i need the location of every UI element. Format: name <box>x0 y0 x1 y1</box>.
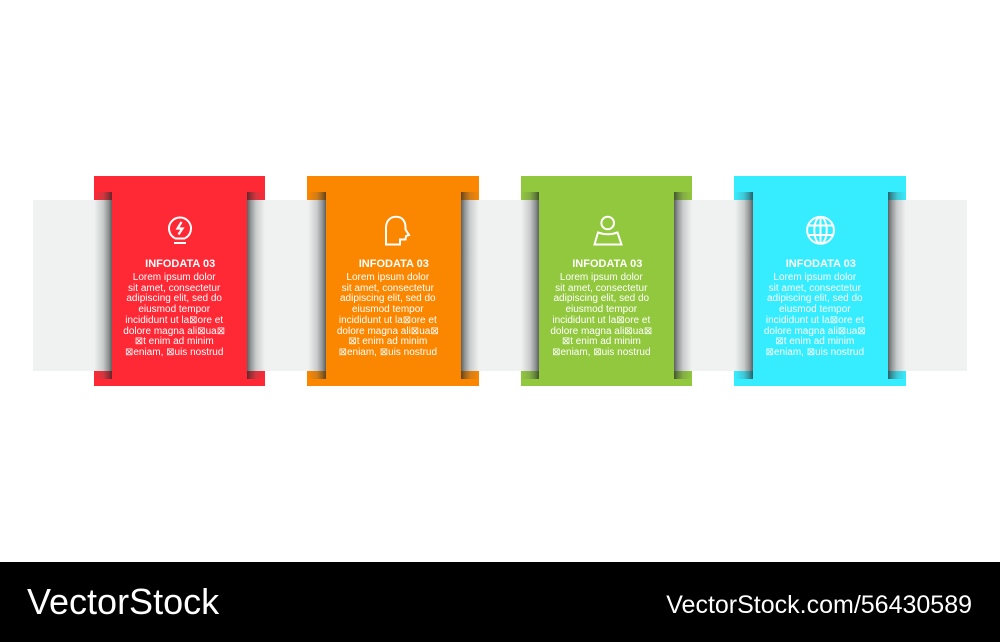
icon: head profile <box>385 216 410 246</box>
text block: sit amet, consectetur <box>342 283 434 294</box>
text block: dolore magna ali⊠ua⊠ <box>764 326 866 337</box>
footer bar <box>0 562 1000 642</box>
icon: globe <box>806 216 835 245</box>
icon: person on map <box>593 216 623 246</box>
text block: ⊠t enim ad minim <box>135 336 214 347</box>
text block: adipiscing elit, sed do <box>553 293 649 304</box>
text block: sit amet, consectetur <box>769 283 861 294</box>
panel: card 1 red <box>94 176 265 386</box>
text block: adipiscing elit, sed do <box>767 293 863 304</box>
text block: incididunt ut la⊠ore et <box>339 315 437 326</box>
text block: dolore magna ali⊠ua⊠ <box>337 326 439 337</box>
panel: card 2 orange <box>307 176 479 386</box>
text block: Lorem ipsum dolor <box>346 272 429 283</box>
text block: sit amet, consectetur <box>555 283 647 294</box>
heading: INFODATA 03 <box>359 258 429 270</box>
logo text: VectorStock <box>27 580 219 622</box>
text block: ⊠t enim ad minim <box>348 336 427 347</box>
text block <box>123 272 225 358</box>
text block: Lorem ipsum dolor <box>560 272 643 283</box>
text block: eiusmod tempor <box>352 304 424 315</box>
text block: ⊠eniam, ⊠uis nostrud <box>766 347 864 358</box>
text block: ⊠t enim ad minim <box>562 336 641 347</box>
text block: ⊠t enim ad minim <box>775 336 854 347</box>
text block <box>337 272 439 358</box>
text block: dolore magna ali⊠ua⊠ <box>123 326 225 337</box>
text block: sit amet, consectetur <box>128 283 220 294</box>
text block: ⊠eniam, ⊠uis nostrud <box>339 347 437 358</box>
text block: Lorem ipsum dolor <box>133 272 216 283</box>
text block <box>550 272 652 358</box>
panel: card 4 cyan <box>734 176 906 386</box>
heading: INFODATA 03 <box>786 258 856 270</box>
text block: incididunt ut la⊠ore et <box>552 315 650 326</box>
heading: INFODATA 03 <box>145 258 215 270</box>
text block: adipiscing elit, sed do <box>340 293 436 304</box>
text block: adipiscing elit, sed do <box>126 293 222 304</box>
text block: eiusmod tempor <box>138 304 210 315</box>
text block: ⊠eniam, ⊠uis nostrud <box>552 347 651 358</box>
text block: eiusmod tempor <box>779 304 851 315</box>
image id text: VectorStock.com/56430589 <box>666 590 972 618</box>
text block: eiusmod tempor <box>565 304 637 315</box>
icon: light bulb with bolt <box>168 216 192 244</box>
text block: Lorem ipsum dolor <box>773 272 856 283</box>
text block <box>764 272 866 358</box>
text block: incididunt ut la⊠ore et <box>766 315 864 326</box>
text block: dolore magna ali⊠ua⊠ <box>550 326 652 337</box>
background band <box>33 200 967 371</box>
panel: card 3 green <box>521 176 692 386</box>
text block: ⊠eniam, ⊠uis nostrud <box>125 347 223 358</box>
text block: incididunt ut la⊠ore et <box>125 315 223 326</box>
heading: INFODATA 03 <box>572 258 642 270</box>
